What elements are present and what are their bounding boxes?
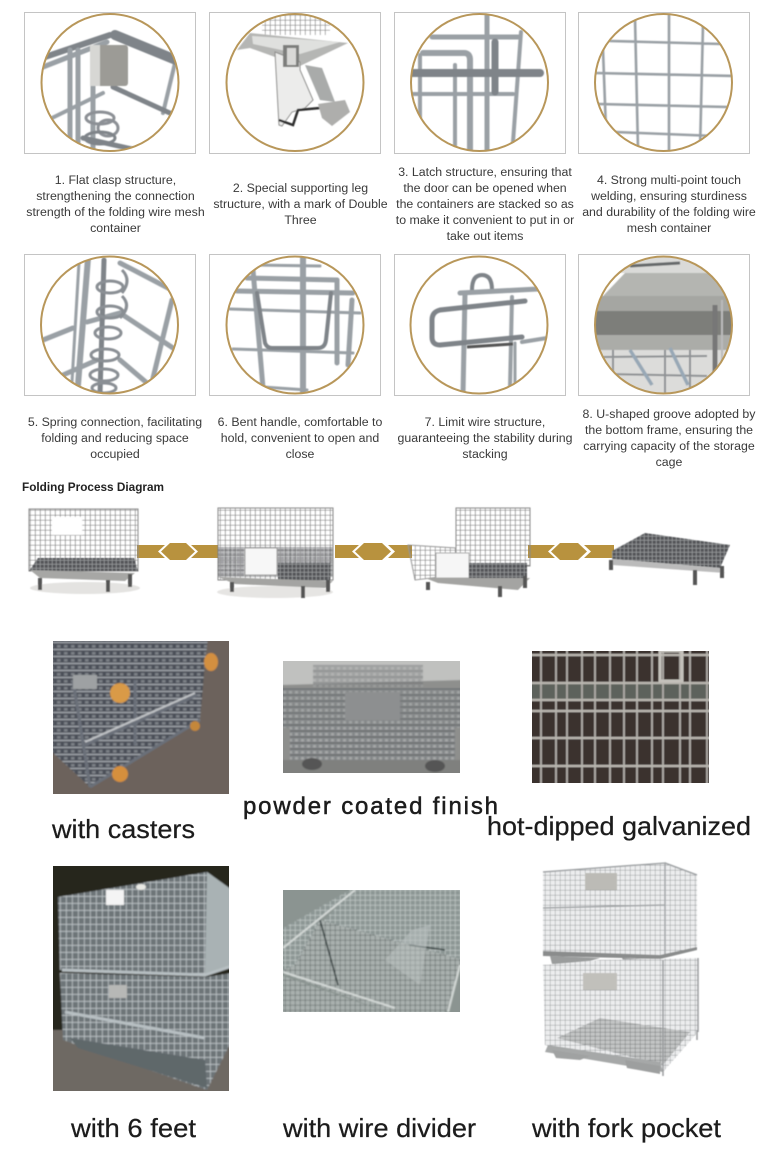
caption 7: guaranteeing the stability during: [398, 431, 573, 445]
cage: fully folded: [611, 533, 730, 585]
photo: hot-dipped galvanized: [530, 649, 711, 785]
label: with wire divider: with wire divider: [282, 1113, 476, 1143]
caption 8: carrying capacity of the storage: [583, 439, 755, 453]
panel: U-shaped groove detail: [578, 254, 750, 396]
caption 6: hold, convenient to open and: [221, 431, 379, 445]
photo: with casters: [50, 638, 232, 798]
photo: with fork pocket: [543, 863, 698, 1076]
caption 2: 2. Special supporting leg: [233, 181, 368, 195]
label: with fork pocket: with fork pocket: [531, 1113, 722, 1143]
caption 6: 6. Bent handle, comfortable to: [218, 415, 382, 429]
caption 7: stacking: [462, 447, 508, 461]
caption 8: cage: [656, 455, 683, 469]
panel: spring connection detail: [24, 254, 196, 396]
panel: touch welding detail: [578, 12, 750, 154]
caption 2: structure, with a mark of Double: [213, 197, 388, 211]
folding process diagram: [29, 508, 730, 598]
panel: bent handle detail: [210, 254, 380, 396]
caption 1: strengthening the connection: [36, 189, 195, 203]
cage: fully open: [29, 509, 140, 594]
caption 1: 1. Flat clasp structure,: [55, 173, 176, 187]
caption 3: to make it convenient to put in or: [396, 213, 574, 227]
label: powder coated finish: powder coated finish: [243, 793, 498, 820]
heading: folding process: Folding Process Diagram: [22, 480, 164, 494]
caption 4: and durability of the folding wire: [582, 205, 756, 219]
caption 3: take out items: [447, 229, 523, 243]
caption 1: container: [90, 221, 141, 235]
photo: powder coated finish: [280, 658, 463, 776]
caption 6: close: [286, 447, 315, 461]
caption 5: folding and reducing space: [41, 431, 189, 445]
cage: partly folded: [408, 508, 530, 597]
caption 2: Three: [284, 213, 317, 227]
caption 3: 3. Latch structure, ensuring that: [398, 165, 572, 179]
label: with casters: with casters: [51, 814, 195, 844]
caption 7: 7. Limit wire structure,: [425, 415, 545, 429]
panel: limit wire detail: [394, 254, 566, 396]
arrow: step 2 to 3: [335, 543, 412, 560]
panel: supporting leg detail: [210, 12, 380, 154]
photo: with wire divider: [280, 887, 463, 1015]
caption 8: 8. U-shaped groove adopted by: [583, 407, 756, 421]
panel: latch detail: [394, 12, 566, 154]
arrow: step 1 to 2: [137, 543, 218, 560]
cage: front door lowered: [217, 508, 333, 598]
panel: flat clasp detail: [24, 12, 196, 154]
label: hot-dipped galvanized: hot-dipped galvanized: [487, 811, 751, 841]
label: with 6 feet: with 6 feet: [70, 1113, 197, 1143]
caption 8: the bottom frame, ensuring the: [585, 423, 753, 437]
photo: with 6 feet: [50, 863, 232, 1094]
caption 4: welding, ensuring sturdiness: [590, 189, 747, 203]
caption 4: mesh container: [627, 221, 711, 235]
arrow: step 3 to 4: [528, 543, 614, 560]
caption 3: the door can be opened when: [403, 181, 567, 195]
caption 3: the containers are stacked so as: [396, 197, 574, 211]
caption 5: occupied: [90, 447, 140, 461]
caption 4: 4. Strong multi-point touch: [597, 173, 741, 187]
caption 1: strength of the folding wire mesh: [26, 205, 205, 219]
caption 5: 5. Spring connection, facilitating: [28, 415, 202, 429]
